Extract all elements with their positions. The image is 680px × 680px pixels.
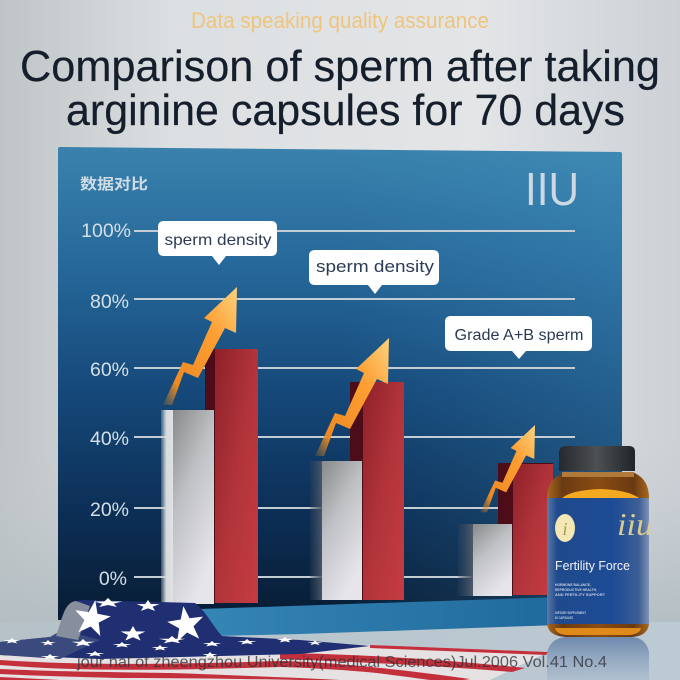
- brand mark: IIU: [525, 163, 579, 215]
- arrow 2: [315, 338, 389, 456]
- subtitle: Data speaking quality assurance: [191, 8, 489, 33]
- bar group 1: [161, 349, 258, 604]
- bottle label: DIETARY SUPPLEMENT: [555, 611, 587, 615]
- chart grid and axis: [81, 220, 575, 590]
- callout: sperm density 2: sperm density: [316, 257, 435, 276]
- bottle label: AND FERTILITY SUPPORT: [555, 593, 606, 597]
- callout: sperm density 1: [158, 221, 277, 265]
- title: [20, 42, 660, 135]
- board ledge: [200, 597, 560, 636]
- chart grid and axis: 80%: [90, 291, 129, 313]
- bottle label: HORMONE BALANCE,: [555, 583, 591, 587]
- bottle body: [547, 472, 649, 637]
- bottle reflection: [547, 637, 649, 680]
- title: Comparison of sperm after taking: [20, 42, 660, 91]
- supplement bottle: [547, 446, 653, 680]
- flag canton: [0, 600, 370, 659]
- chart grid and axis: 0%: [99, 568, 127, 590]
- callout: Grade A+B sperm: Grade A+B sperm: [454, 327, 584, 344]
- panel: chart board: [58, 147, 622, 636]
- bottle cap: [559, 446, 635, 471]
- callout: Grade A+B sperm: [445, 316, 592, 359]
- arrow 3: [480, 425, 535, 512]
- chart grid and axis: 60%: [90, 359, 129, 381]
- arrow 1: [163, 287, 237, 405]
- callout: sperm density 2: [309, 250, 439, 294]
- source citation: jour nal of zheengzhou University(medical Sciences)Jul.2006 Vol.41 No.4: [76, 654, 607, 671]
- callout: sperm density 1: sperm density: [164, 232, 272, 249]
- flag: [0, 597, 548, 680]
- bottle label: iiu: [617, 506, 653, 542]
- bottle label: REPRODUCTIVE HEALTH,: [555, 588, 597, 592]
- bottle label: [547, 498, 653, 624]
- flag stripes: [0, 645, 548, 680]
- chart grid and axis: 20%: [90, 499, 129, 521]
- bottle label: i: [562, 519, 568, 539]
- chart grid and axis: 40%: [90, 428, 129, 450]
- bar group 2: [310, 382, 404, 600]
- bottle label: Fertility Force: [555, 558, 630, 573]
- bar group 3: [458, 463, 553, 596]
- chart grid and axis: 100%: [81, 220, 131, 242]
- title: arginine capsules for 70 days: [66, 86, 625, 135]
- flag stars: [3, 597, 323, 659]
- bottle label: 60 CAPSULES: [555, 616, 573, 620]
- panel heading: 数据对比: [80, 175, 148, 193]
